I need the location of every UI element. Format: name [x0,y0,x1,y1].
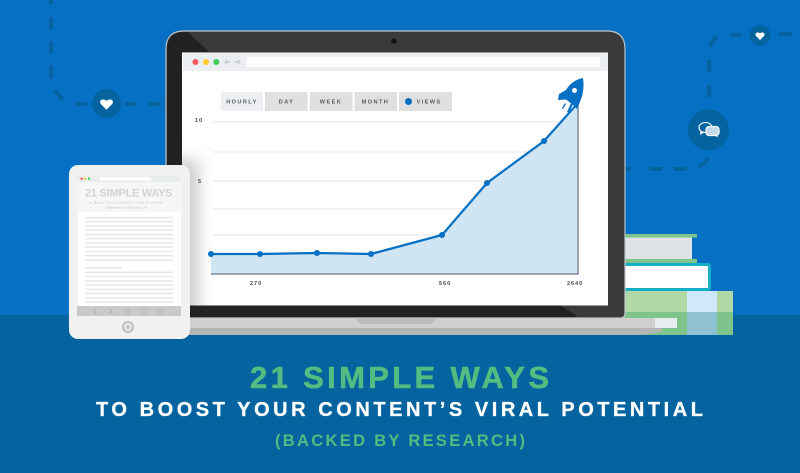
tablet home button [123,322,133,332]
axis labels: 560 [439,281,451,287]
icon: heart right [750,25,770,46]
tablet [69,165,190,339]
screen [170,52,608,320]
bezel dark corner [167,32,578,317]
icon: heart left [92,89,121,118]
chart tabs: VIEWS [416,100,442,106]
books stack [620,234,733,335]
axis labels: 5 [198,179,202,185]
chart tabs: WEEK [320,100,342,106]
axis labels [195,118,583,287]
tagline: (BACKED BY RESEARCH) [275,432,525,450]
axis labels: 2640 [567,281,583,287]
book: middle [620,263,711,291]
axis labels: 10 [195,118,203,124]
chart tabs: MONTH [362,100,389,106]
data line [211,103,578,254]
tablet subtitle: to Boost Your Content's Viral Potential [89,200,163,204]
axis labels: 270 [250,281,262,287]
tablet shadow [182,152,206,306]
area fill [211,103,578,274]
line chart [195,103,583,287]
dashed path left [51,0,161,104]
chart tabs: DAY [279,100,294,106]
tablet subtitle: (Backed by Research) [106,206,148,210]
title: 21 SIMPLE WAYS [250,360,549,395]
icon: rocket [558,78,584,113]
dashed path right [625,34,792,169]
tablet toolbar [77,306,181,316]
camera [391,38,397,44]
tablet title: 21 SIMPLE WAYS [85,188,172,200]
subtitle: TO BOOST YOUR CONTENT’S VIRAL POTENTIAL [96,399,703,421]
book: top [620,234,697,263]
tablet screen [78,176,181,316]
icon: chat bubbles [688,110,729,150]
laptop lid [166,31,625,318]
tablet text lines [85,218,173,302]
browser bar [183,53,608,71]
laptop [166,31,677,335]
tablet subtitle [89,200,163,210]
laptop base [188,318,677,335]
chart tabs [221,92,452,111]
book: bottom [620,291,733,335]
chart tabs: HOURLY [226,100,258,106]
